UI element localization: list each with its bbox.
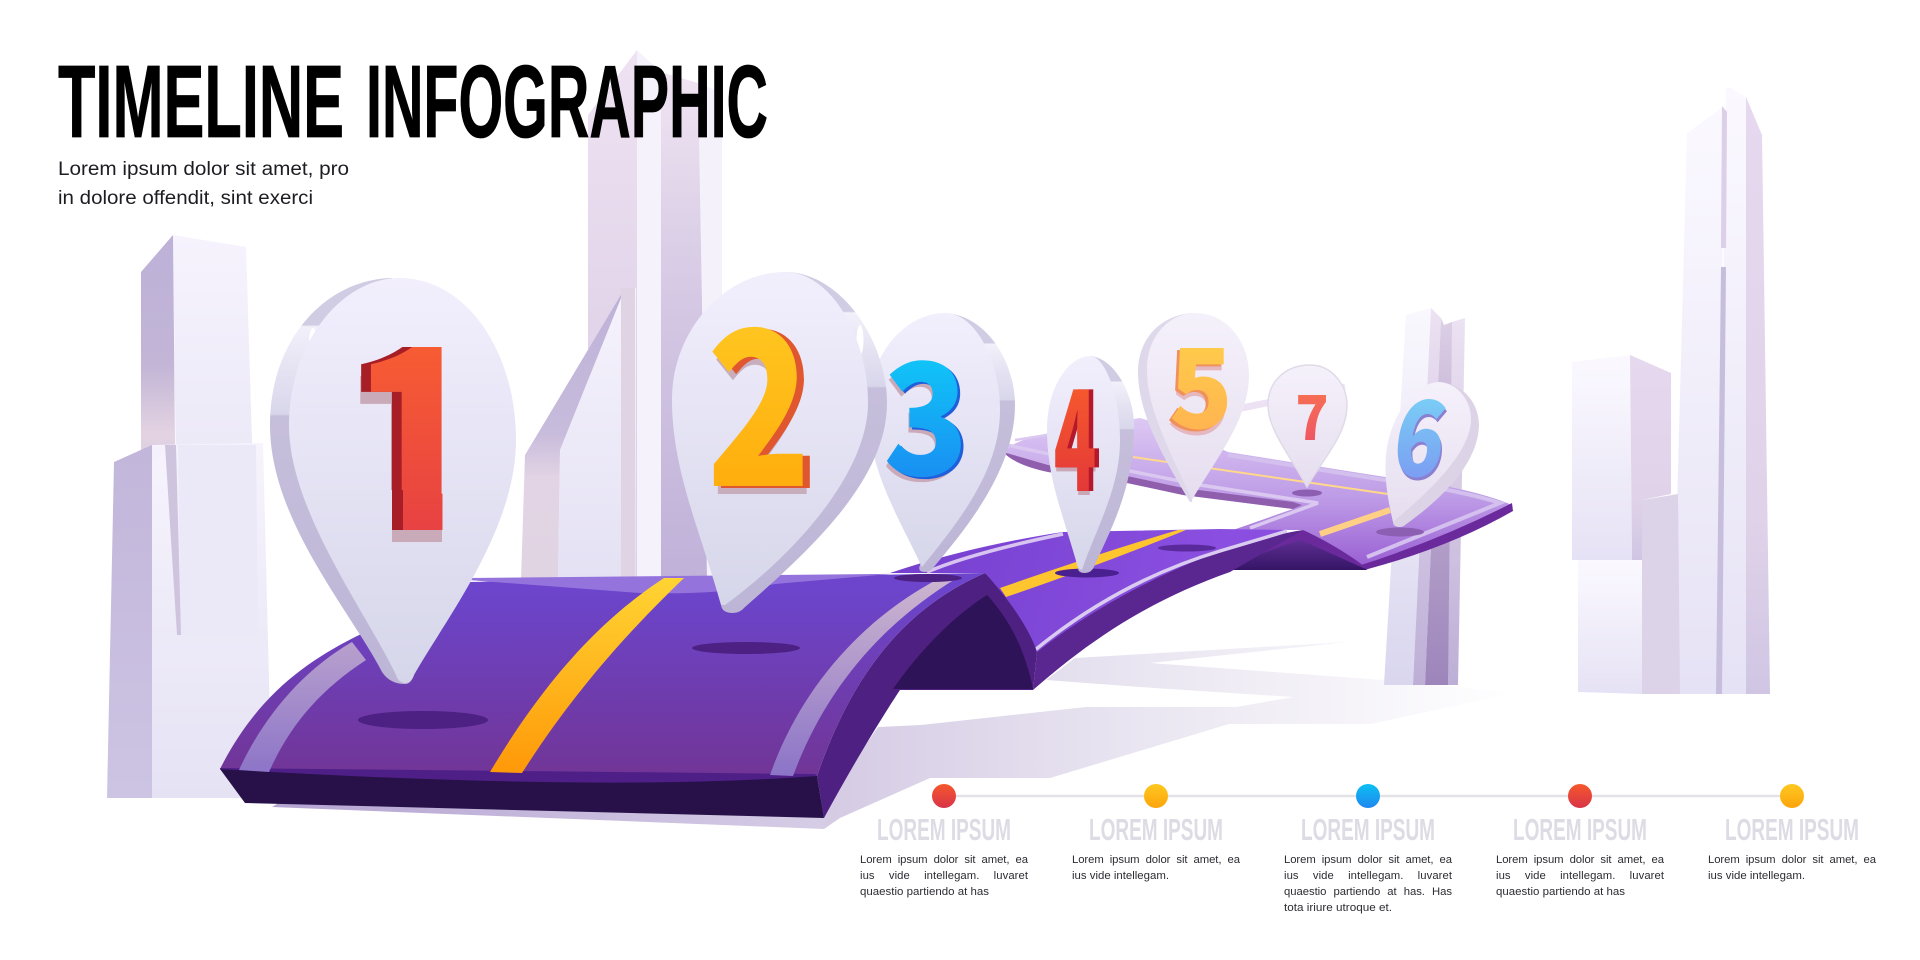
subtitle: Lorem ipsum dolor sit amet, pro: [58, 159, 349, 180]
timeline step 5: [1708, 784, 1877, 882]
pin 1: 1: [349, 237, 485, 603]
building: left tall tower: [141, 235, 258, 635]
pin 1: [270, 237, 516, 684]
timeline line: [944, 795, 1792, 797]
title: TIMELINE: [58, 44, 344, 159]
pin 1: 1: [338, 249, 475, 615]
timeline step 1: [860, 784, 1029, 898]
pin 1: 1: [339, 237, 475, 603]
timeline step 1: LOREM IPSUM: [877, 812, 1011, 847]
timeline step 3: [1284, 784, 1453, 914]
pin 6: [1385, 356, 1479, 527]
timeline step 4: LOREM IPSUM: [1513, 812, 1647, 847]
pin 4: 4: [1055, 333, 1097, 535]
road: far section: [1003, 387, 1513, 569]
timeline step 3: LOREM IPSUM: [1301, 812, 1435, 847]
timeline step 2: LOREM IPSUM: [1089, 812, 1223, 847]
pin 6: 6: [1387, 359, 1458, 510]
pin 2: 2: [711, 246, 815, 557]
timeline step 4: ius vide intellegam. luvaret: [1496, 870, 1665, 882]
title: INFOGRAPHIC: [366, 44, 768, 159]
building: centre tall tower: [588, 50, 722, 580]
timeline step 5: ius vide intellegam.: [1708, 870, 1805, 882]
timeline step 3: Lorem ipsum dolor sit amet, ea: [1284, 854, 1453, 866]
road: front arch and side band: [817, 573, 1037, 818]
road: front section surface: [220, 573, 985, 818]
pin 2: [672, 238, 887, 613]
timeline step 5: Lorem ipsum dolor sit amet, ea: [1708, 854, 1877, 866]
timeline step 4: Lorem ipsum dolor sit amet, ea: [1496, 854, 1665, 866]
building: left low block: [107, 443, 272, 798]
timeline step 2: ius vide intellegam.: [1072, 870, 1169, 882]
pin 5: 5: [1167, 307, 1231, 466]
pin 7: [1268, 365, 1347, 487]
pin 5: [1138, 301, 1249, 502]
timeline step 3: ius vide intellegam. luvaret: [1284, 870, 1453, 882]
building: right tall tower: [1672, 88, 1770, 694]
pin 3: 3: [883, 301, 968, 525]
pin 5: 5: [1166, 303, 1230, 462]
pin 4: 4: [1054, 329, 1096, 531]
timeline step 4: [1496, 784, 1665, 898]
pin 2: 2: [707, 238, 811, 549]
pin 2: 2: [714, 240, 819, 551]
timeline step 2: Lorem ipsum dolor sit amet, ea: [1072, 854, 1241, 866]
timeline step 1: Lorem ipsum dolor sit amet, ea: [860, 854, 1029, 866]
pin 4: 4: [1058, 329, 1101, 531]
building: centre slanted block: [521, 288, 636, 580]
title: [58, 44, 768, 159]
building: right mid block: [1572, 355, 1680, 694]
pin 4: [1047, 329, 1134, 573]
timeline step 3: tota iriure utroque et.: [1284, 902, 1392, 914]
pin 3: 3: [884, 296, 968, 520]
pin 3: 3: [886, 298, 971, 522]
timeline step 2: [1072, 784, 1241, 882]
pin 6: 6: [1385, 356, 1457, 507]
ground shadow: [272, 642, 1514, 829]
pin 5: 5: [1169, 301, 1233, 460]
timeline step 4: quaestio partiendo at has: [1496, 886, 1625, 898]
subtitle: [58, 159, 349, 209]
timeline step 3: quaestio partiendo at has. Has: [1284, 886, 1452, 898]
timeline step 1: quaestio partiendo at has: [860, 886, 989, 898]
road: middle section: [890, 529, 1303, 690]
pin 3: [868, 296, 1015, 572]
pin 7: 7: [1295, 368, 1329, 458]
road: right arch: [1220, 530, 1368, 570]
building: back tower behind road: [1384, 308, 1465, 685]
timeline step 1: ius vide intellegam. luvaret: [860, 870, 1029, 882]
subtitle: in dolore offendit, sint exerci: [58, 188, 313, 209]
